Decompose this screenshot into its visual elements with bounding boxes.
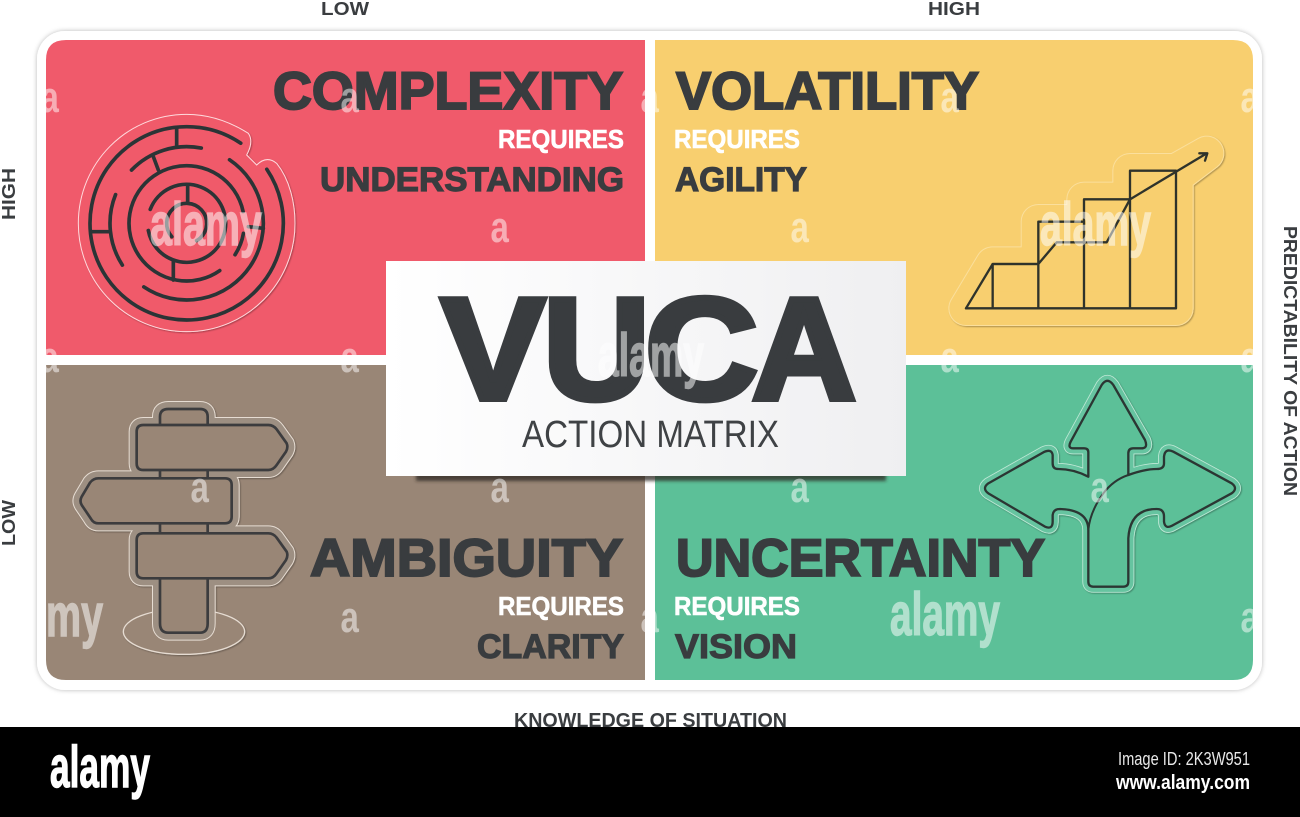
title: VUCA: V	[441, 268, 545, 430]
matrix frame	[37, 31, 1262, 690]
subtitle: action matrix: ACTION MATRIX	[522, 414, 779, 456]
heading: complexity: COMPLEXITY	[273, 62, 623, 121]
label: requires: REQUIRES	[498, 124, 624, 154]
icon: maze	[52, 89, 321, 358]
label: understanding: UNDERSTANDING	[320, 161, 624, 199]
axis label: predictability of action: PREDICTABILITY OF ACTION	[1280, 226, 1300, 496]
footer bar	[0, 727, 1300, 817]
title: VUCA: U	[543, 268, 650, 430]
heading: uncertainty: UNCERTAINTY	[676, 529, 1045, 588]
website: www.alamy.com	[1115, 772, 1250, 794]
panel: ambiguity	[46, 365, 645, 680]
label: vision: VISION	[675, 628, 797, 666]
watermarks: aaa	[341, 594, 1259, 642]
watermarks: aaaaa	[40, 74, 1259, 122]
panel: complexity	[46, 40, 645, 358]
watermarks: alamy	[1040, 191, 1151, 258]
heading: volatility: VOLATILITY	[676, 62, 979, 121]
label: clarity: CLARITY	[477, 628, 624, 666]
axis label: knowledge of situation: KNOWLEDGE OF SITUATION	[514, 710, 787, 732]
center card	[386, 261, 906, 481]
icon: signpost	[80, 409, 287, 654]
label: agility: AGILITY	[675, 161, 807, 199]
label: requires: REQUIRES	[674, 591, 800, 621]
watermarks	[40, 74, 1259, 649]
panel: uncertainty	[655, 365, 1253, 680]
title: VUCA	[441, 268, 856, 430]
label: requires: REQUIRES	[674, 124, 800, 154]
watermarks: alamy	[150, 191, 262, 258]
image id: Image ID: 2K3W951	[1118, 749, 1250, 769]
panel: volatility	[655, 40, 1253, 355]
watermarks: aaaa	[40, 334, 1259, 382]
watermarks: alamy	[890, 581, 1000, 648]
title: VUCA: C	[645, 268, 758, 430]
label: requires: REQUIRES	[498, 591, 624, 621]
watermarks: aa	[491, 204, 809, 252]
icon: rising bar chart	[966, 153, 1207, 308]
footer logo: alamy	[50, 735, 150, 800]
icon: three-way arrows	[985, 381, 1235, 587]
heading: ambiguity: AMBIGUITY	[310, 529, 623, 588]
watermarks: aaaa	[191, 464, 1109, 512]
title: VUCA: A	[752, 268, 856, 430]
watermarks: my	[46, 582, 103, 649]
watermarks: alamy	[598, 322, 704, 389]
